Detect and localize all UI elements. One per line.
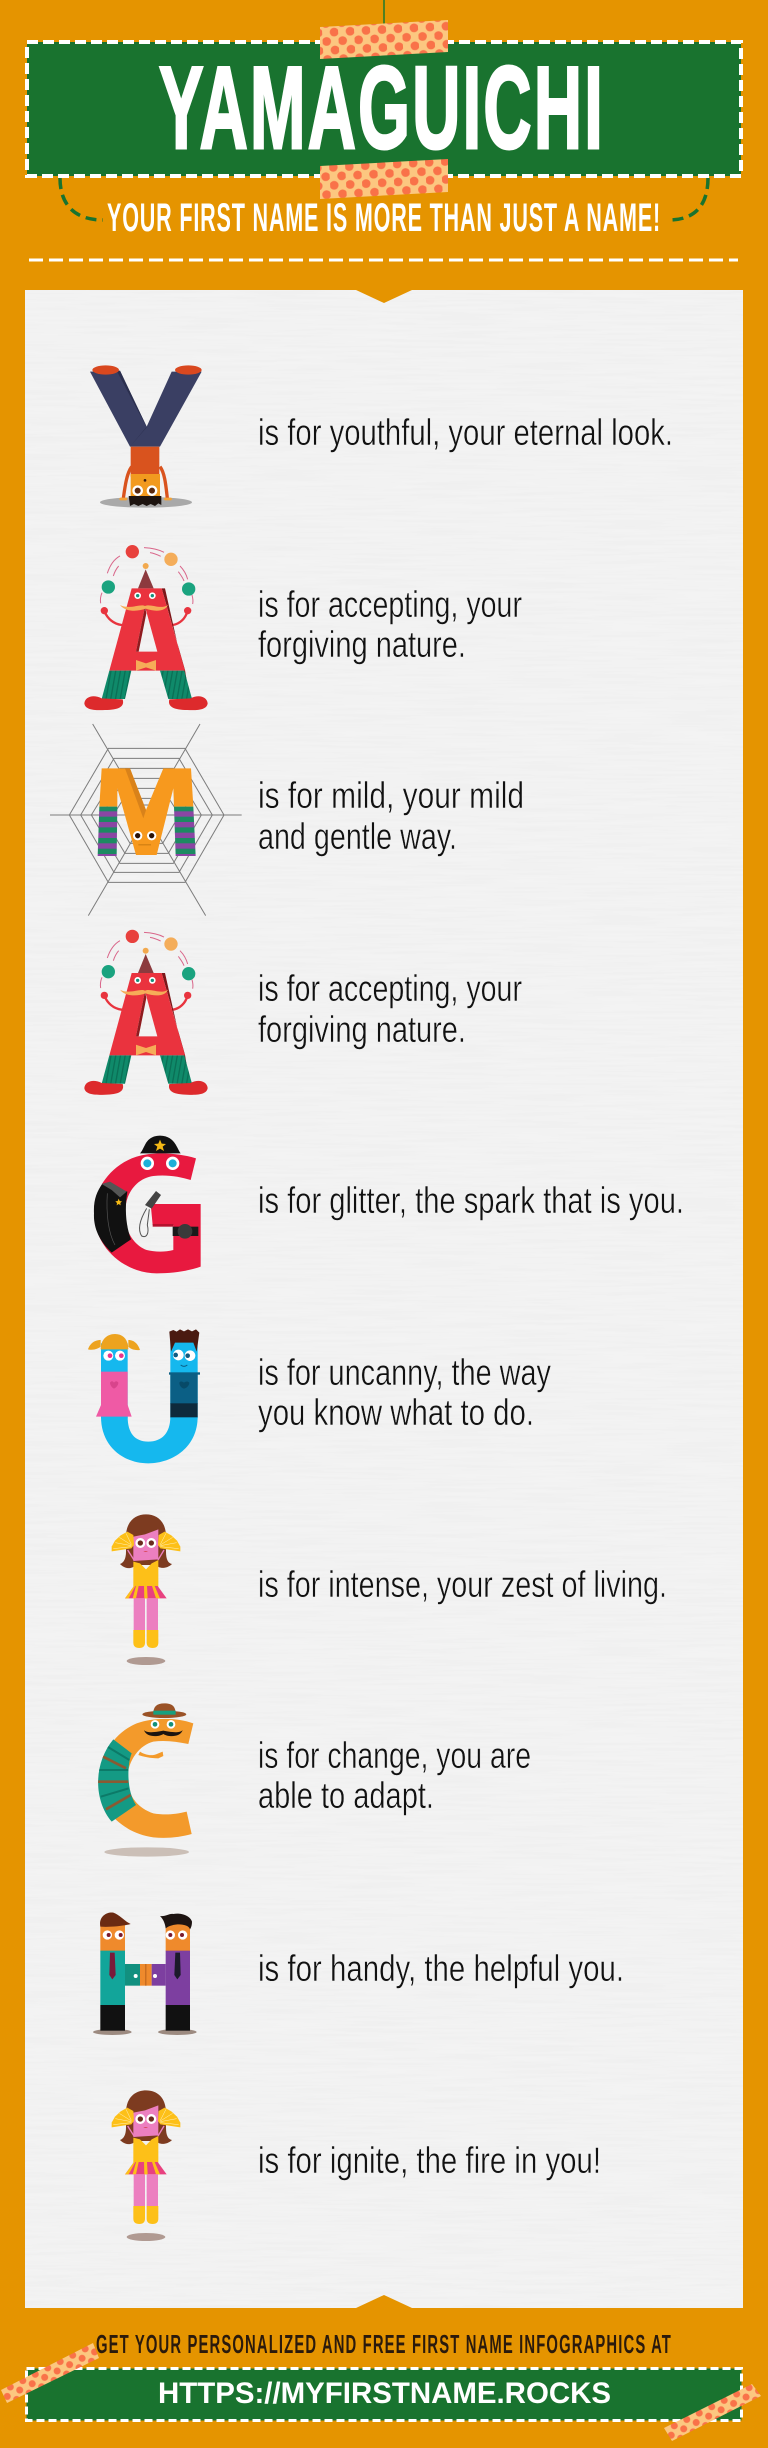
text	[258, 775, 524, 857]
left tape	[1, 2343, 99, 2403]
icon: letter C	[93, 1703, 193, 1857]
url banner	[26, 2368, 742, 2420]
right tape	[664, 2384, 761, 2441]
text: forgiving nature.	[258, 624, 466, 665]
text: you know what to do.	[258, 1392, 534, 1433]
icon: letter H	[93, 1913, 197, 2035]
row: A	[84, 545, 522, 710]
row: A second	[84, 930, 522, 1095]
text: and gentle way.	[258, 816, 457, 857]
text: forgiving nature.	[258, 1009, 466, 1050]
icon: letter A	[84, 545, 208, 710]
row: G	[94, 1136, 684, 1273]
text: is for handy, the helpful you.	[258, 1948, 624, 1989]
row: I second	[112, 2090, 601, 2241]
icon: letter I girl	[112, 2090, 180, 2241]
icon: letter G	[94, 1136, 201, 1273]
row: H	[93, 1913, 624, 2035]
icon: letter I girl	[112, 1514, 180, 1665]
row: U	[88, 1329, 551, 1463]
icon: letter U	[88, 1329, 200, 1463]
text: is for accepting, your	[258, 968, 522, 1009]
row: Y	[90, 365, 673, 508]
text	[258, 1352, 551, 1433]
footer	[1, 2329, 761, 2441]
text: is for mild, your mild	[258, 775, 524, 816]
row: I	[112, 1514, 667, 1665]
text	[258, 1735, 531, 1816]
row: C	[93, 1703, 531, 1857]
text	[258, 968, 522, 1050]
text: is for uncanny, the way	[258, 1352, 551, 1393]
icon: letter A	[84, 930, 208, 1095]
text	[258, 584, 522, 665]
text: is for accepting, your	[258, 584, 522, 625]
row: M	[50, 724, 524, 916]
left bracket	[60, 178, 103, 220]
icon: letter M with web	[50, 724, 242, 916]
text: able to adapt.	[258, 1775, 434, 1816]
main paper panel	[25, 290, 743, 2308]
url: HTTPS://MYFIRSTNAME.ROCKS	[158, 2377, 611, 2410]
icon: letter Y	[90, 365, 202, 508]
title banner	[27, 42, 741, 176]
right bracket	[669, 178, 708, 220]
hanging thread	[383, 0, 385, 24]
lower tape	[320, 159, 448, 199]
text: is for change, you are	[258, 1735, 531, 1776]
text: is for youthful, your eternal look.	[258, 412, 673, 453]
top tape	[320, 20, 448, 59]
text: is for ignite, the fire in you!	[258, 2140, 601, 2181]
header	[27, 0, 741, 240]
